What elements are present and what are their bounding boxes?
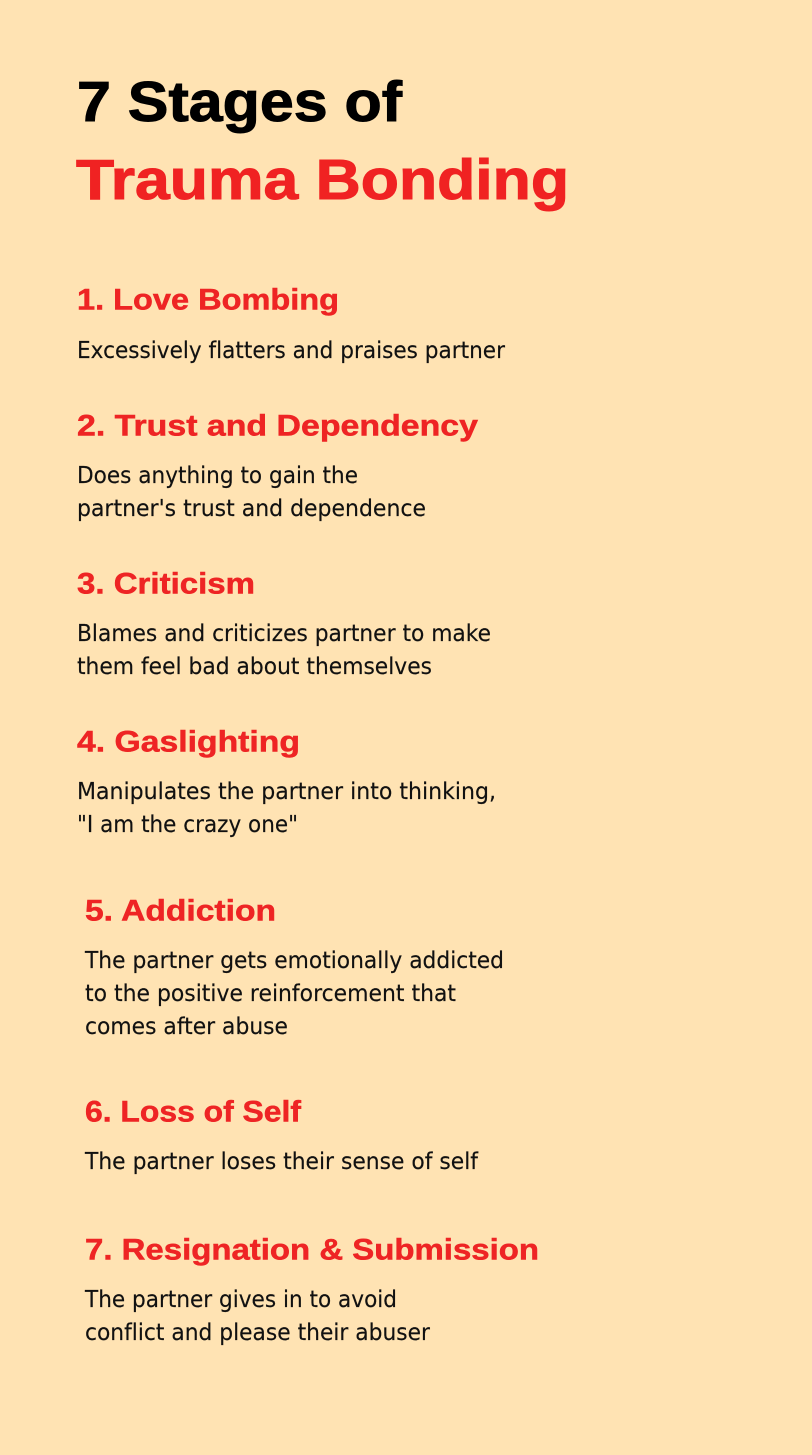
title: Trauma Bonding <box>76 148 569 212</box>
title: 7 Stages of <box>77 70 403 134</box>
stage 2: trust and dependency: partner's trust and dependence <box>77 496 426 522</box>
stage 1: love bombing <box>77 284 506 364</box>
stage 4: gaslighting: Manipulates the partner into thinking, <box>77 779 496 805</box>
stage 5: addiction: 5. Addiction <box>85 894 276 928</box>
stage 5: addiction <box>84 894 504 1040</box>
stage 6: loss of self <box>84 1096 479 1175</box>
stage 7: resignation and submission <box>84 1234 539 1346</box>
stage 4: gaslighting <box>77 726 496 838</box>
stage 3: criticism: Blames and criticizes partner to make <box>77 621 491 647</box>
stage 5: addiction: to the positive reinforcement that <box>85 981 456 1007</box>
stage 2: trust and dependency: Does anything to gain the <box>77 463 358 489</box>
stage 3: criticism: 3. Criticism <box>77 568 255 600</box>
stage 4: gaslighting: 4. Gaslighting <box>77 726 300 758</box>
stage 3: criticism <box>77 568 491 680</box>
stage 7: resignation and submission: conflict and please their abuser <box>85 1320 431 1346</box>
stage 4: gaslighting: "I am the crazy one" <box>77 812 298 838</box>
stage 5: addiction: The partner gets emotionally addicted <box>84 948 504 974</box>
stage 7: resignation and submission: The partner gives in to avoid <box>84 1287 397 1313</box>
stage 2: trust and dependency: 2. Trust and Dependency <box>77 410 479 442</box>
stage 5: addiction: comes after abuse <box>85 1014 288 1040</box>
stage 2: trust and dependency <box>77 410 479 522</box>
stage 6: loss of self: The partner loses their sense of self <box>84 1149 479 1175</box>
stage 1: love bombing: Excessively flatters and praises partner <box>77 338 506 364</box>
stage 3: criticism: them feel bad about themselves <box>77 654 432 680</box>
stage 6: loss of self: 6. Loss of Self <box>85 1096 301 1128</box>
stage 1: love bombing: 1. Love Bombing <box>77 284 339 316</box>
title <box>76 70 569 212</box>
stage 7: resignation and submission: 7. Resignation & Submission <box>85 1234 539 1266</box>
